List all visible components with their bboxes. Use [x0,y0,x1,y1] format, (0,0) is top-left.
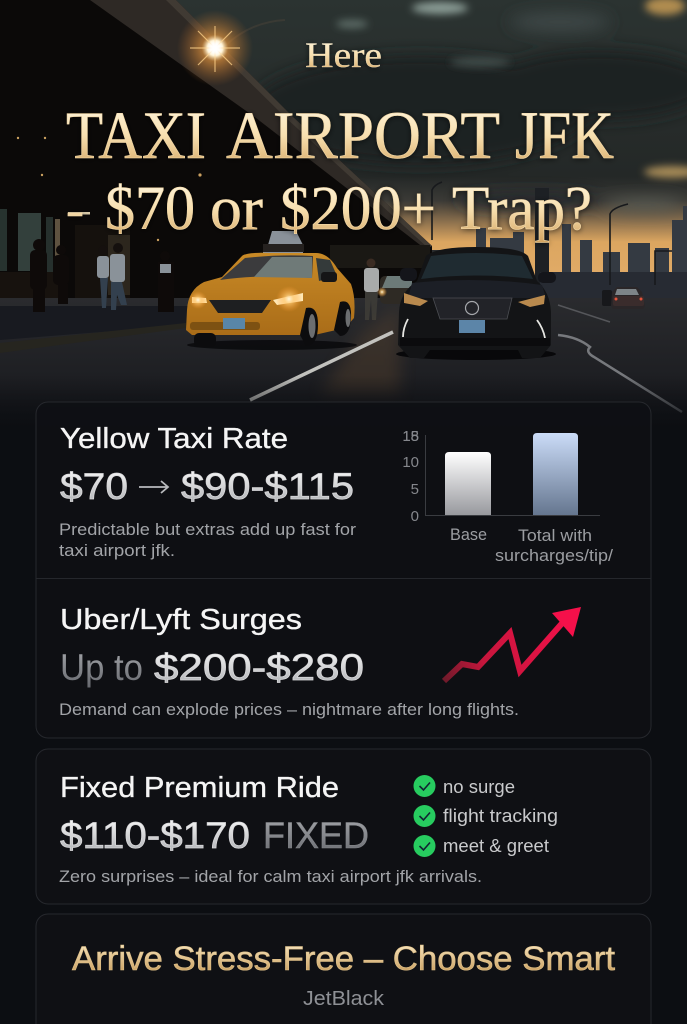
main title line 2: Trap? [452,175,592,243]
panel: fixed premium ride [36,749,651,904]
bar: base [445,452,491,515]
city skyline [425,188,687,300]
small car on far road [602,287,645,309]
price: $200-$280 [154,647,364,688]
bar chart: base vs total fare: 5 [411,481,419,498]
brand name: JetBlack [303,988,385,1010]
price range: $90-$115 [181,466,354,507]
hero photo: airport taxi rank at dusk [0,0,687,430]
street lamps on the right [432,182,672,285]
heading: Fixed Premium Ride [60,772,339,804]
main title line 1: TAXI [66,97,206,173]
check: meet and greet [414,835,549,857]
price [60,815,369,856]
main title line 2: $200+ [280,175,436,243]
fade from photo into page [0,375,687,430]
section: yellow taxi rate [59,423,356,560]
headlights [404,293,428,306]
price: Up to [60,647,143,688]
mirrors [400,268,556,283]
feature checklist [414,775,558,857]
call to action headline: Arrive Stress-Free – Choose Smart [72,940,616,978]
heading: Uber/Lyft Surges [60,604,302,636]
bar chart: base vs total fare: Total with [518,527,592,545]
main title line 2: $70 [105,175,195,243]
section: uber and lyft surges [59,604,519,719]
bar chart: base vs total fare: 0 [411,508,419,525]
bar chart: base vs total fare: 10 [402,454,419,471]
sun flare and lamp post [177,10,285,86]
main title line 2: or [210,175,263,243]
grille and badge [433,298,512,319]
check: flight tracking [414,805,558,827]
sidewalk and curb [0,306,190,353]
price: $110-$170 [60,815,250,856]
title block [66,35,614,243]
road surface [0,298,687,428]
description: Zero surprises – ideal for calm taxi airport jfk arrivals. [59,867,482,886]
kicker: Here [305,35,382,75]
main title line 1: AIRPORT [226,97,500,173]
check: flight tracking: flight tracking [443,806,558,826]
bar chart: base vs total fare: surcharges/tip/ [495,547,613,565]
distant car [377,276,412,304]
price: FIXED [263,815,369,856]
road glow and lane markings [250,305,682,412]
description: Predictable but extras add up fast for [59,520,356,539]
bar chart: base vs total fare: 18 [402,428,419,445]
panel: taxi and ride-share rates [36,402,651,738]
main title line 2: – [68,175,82,243]
bar chart: base vs total fare: 15 [402,428,419,445]
taxi wheels [194,301,351,347]
terminal windows [0,137,202,310]
taxi roof sign [263,231,304,253]
yellow taxi [186,231,357,350]
terminal overpass silhouette [0,0,432,300]
panel: call to action [36,914,651,1024]
icon: surge arrow [444,607,581,681]
bar: total [533,433,578,515]
check: no surge: no surge [443,777,515,797]
bar chart: base vs total fare: Base [450,526,487,544]
check: no surge [414,775,515,797]
taxi body [186,253,355,336]
check: meet and greet: meet & greet [443,836,549,856]
black premium car [396,247,556,360]
price arrow [139,481,168,493]
heading: Yellow Taxi Rate [60,423,288,455]
price [60,647,364,688]
main title line 1: JFK [515,97,614,173]
bar chart: base vs total fare [402,428,613,565]
windshield [421,253,533,279]
taxi grille and lights [209,300,271,313]
dusk sky [0,0,687,295]
description: Demand can explode prices – nightmare after long flights. [59,700,519,719]
pedestrians [30,239,379,320]
price: $70 [60,466,128,507]
description: taxi airport jfk. [59,541,175,560]
